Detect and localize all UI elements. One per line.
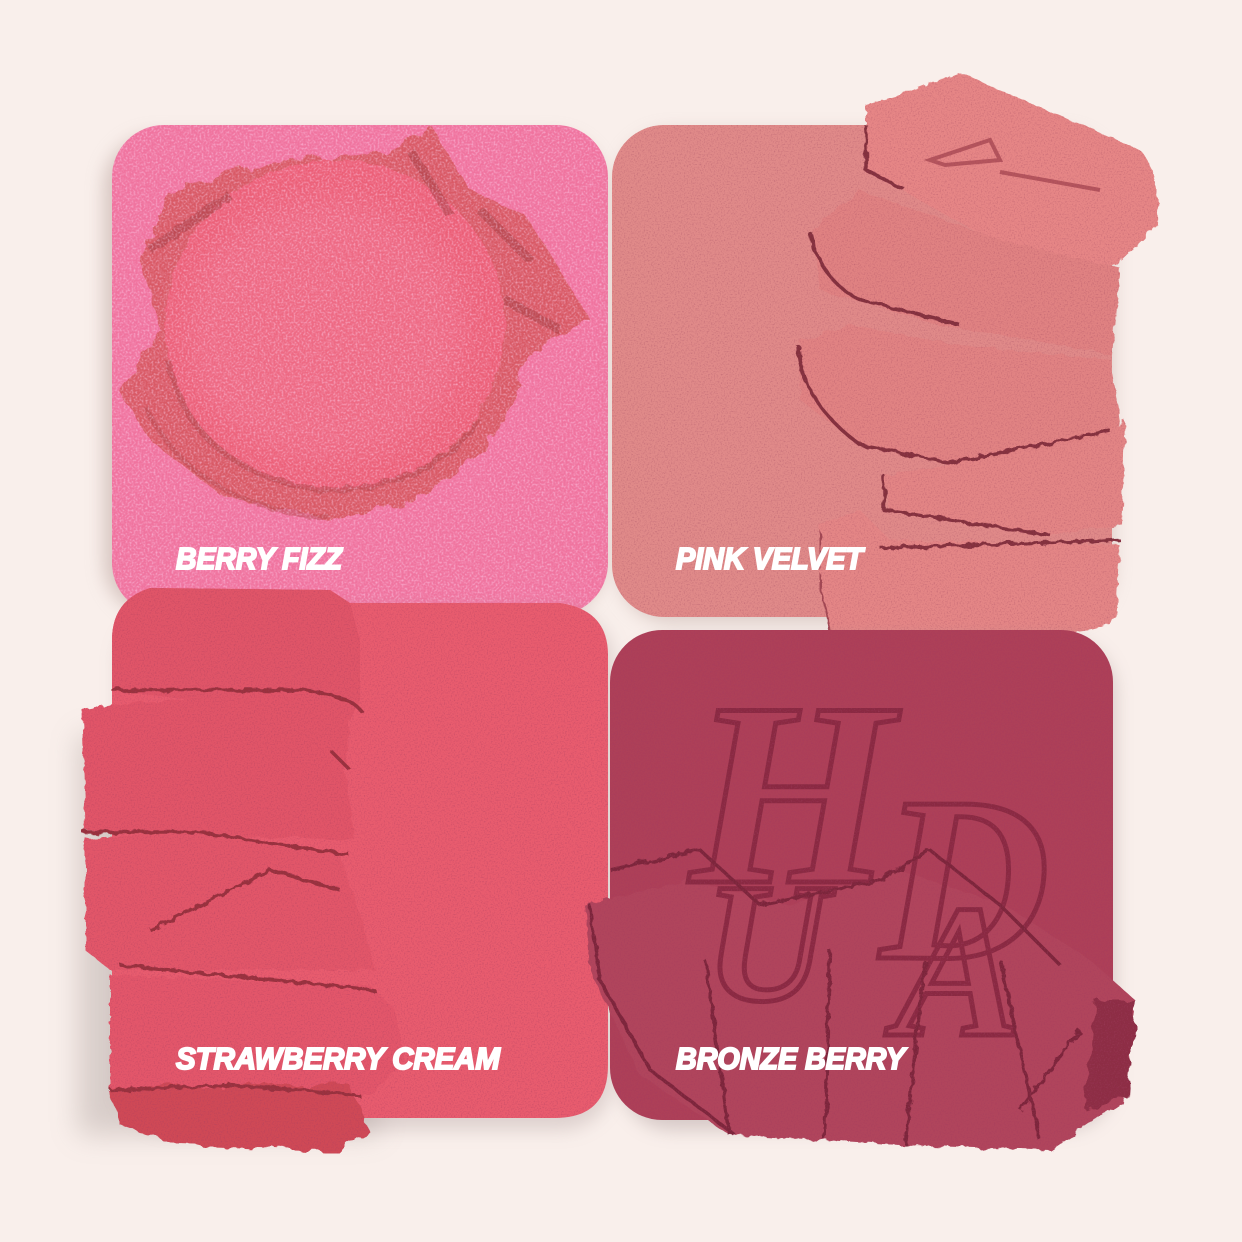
label: berry fizz: BERRY FIZZ xyxy=(176,541,343,576)
embossed HUDA logo: U xyxy=(705,849,836,1037)
powder cracks xyxy=(590,850,1080,1145)
panel: bronze berry swatch xyxy=(585,630,1135,1150)
label: bronze berry: BRONZE BERRY xyxy=(676,1041,908,1076)
crushed powder ring xyxy=(118,125,590,520)
panel: pink velvet swatch xyxy=(612,72,1158,632)
sparkle grain xyxy=(112,125,608,615)
broken powder strips xyxy=(798,72,1158,632)
broken powder strips xyxy=(82,588,405,1150)
embossed HUDA logo: A xyxy=(885,867,1022,1077)
embossed HUDA logo: H xyxy=(686,649,903,939)
broken lower powder xyxy=(585,870,1135,1150)
panel: strawberry cream swatch xyxy=(78,588,613,1150)
label: strawberry cream: STRAWBERRY CREAM xyxy=(176,1041,501,1076)
label: pink velvet: PINK VELVET xyxy=(676,541,866,576)
embossed HUDA logo xyxy=(686,649,1050,1077)
panel: berry fizz swatch xyxy=(104,125,608,615)
embossed HUDA logo: D xyxy=(878,749,1050,1009)
